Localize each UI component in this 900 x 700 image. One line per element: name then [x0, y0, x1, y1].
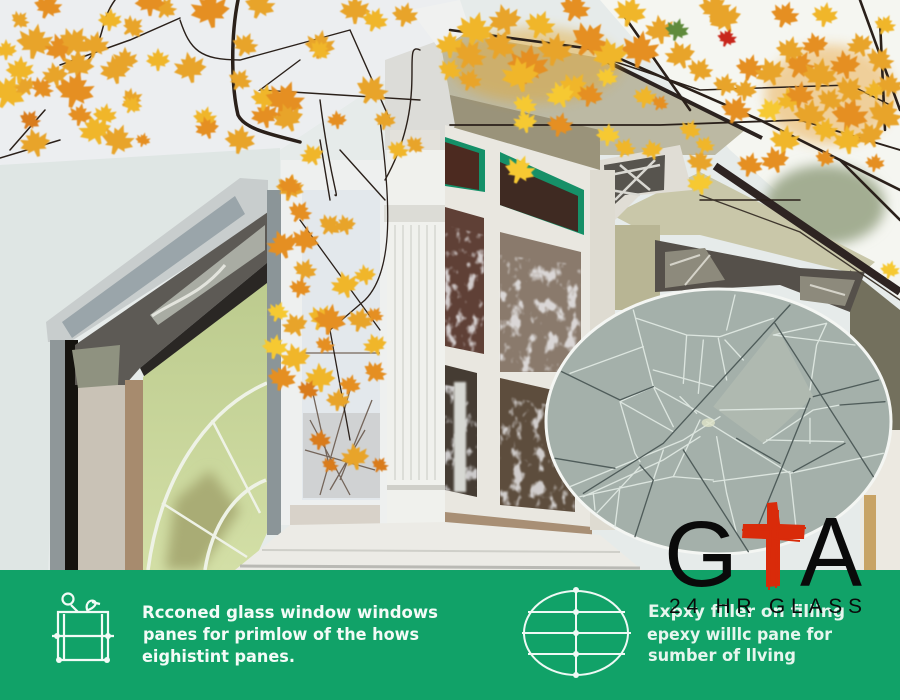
text block: right caption: [647, 602, 845, 666]
window frame outer band: [46, 178, 268, 342]
main panes: [445, 207, 484, 354]
logo red cross: [742, 502, 806, 590]
window sill: [445, 512, 592, 535]
cracks: [555, 295, 885, 552]
text block: right caption: Expxy filler on filling: [648, 602, 845, 622]
panel: cracked glass inset: [546, 289, 891, 554]
text block: left caption: panes for primlow of the hows: [143, 625, 419, 645]
panel: left arched window: [46, 178, 281, 570]
fluted column: [384, 130, 447, 525]
maple leaves: top left cluster: [0, 0, 209, 161]
upper eave and soffit: [385, 0, 762, 225]
background tree foliage: [765, 165, 885, 245]
maple leaves: eave cluster: [434, 0, 718, 197]
icon: window with plants: [52, 594, 114, 663]
soft foliage mass behind leaves: [450, 27, 895, 145]
text block: left caption: [142, 603, 438, 667]
tree branches: [0, 0, 900, 440]
logo tagline: 24 HR GLASS: [669, 595, 862, 618]
text block: left caption: Rcconed glass window windows: [142, 603, 438, 623]
window reflections: [445, 225, 581, 512]
green glass: [143, 283, 267, 570]
transom panes with green trim: [445, 137, 485, 192]
maple leaves: hanging cluster over bay window: [260, 172, 392, 476]
panel: main sash window: [445, 125, 615, 535]
stone window base: [235, 522, 642, 570]
ornament band: [75, 212, 268, 385]
logo letter A: A: [800, 497, 863, 607]
inner colonnette reflection: [454, 382, 466, 492]
maple leaves: top right canopy: [662, 0, 900, 281]
icon: round pane grid: [522, 587, 631, 678]
text block: left caption: eighistint panes.: [142, 647, 295, 667]
logo letter G: G: [664, 502, 738, 606]
logo: GTA 24 HR Glass: [664, 497, 863, 618]
text block: right caption: epexy willlc pane for: [647, 625, 833, 645]
green footer band: [0, 570, 900, 700]
lower roof, gutter and siding: [612, 166, 900, 570]
maple leaves: upper center cluster: [187, 0, 429, 204]
stone column: [78, 385, 125, 570]
text block: right caption: sumber of llving: [648, 646, 796, 666]
panel: bay side window: [281, 160, 392, 525]
ornamental corner bracket: [600, 145, 692, 225]
glass lattice arcs: [148, 383, 267, 570]
